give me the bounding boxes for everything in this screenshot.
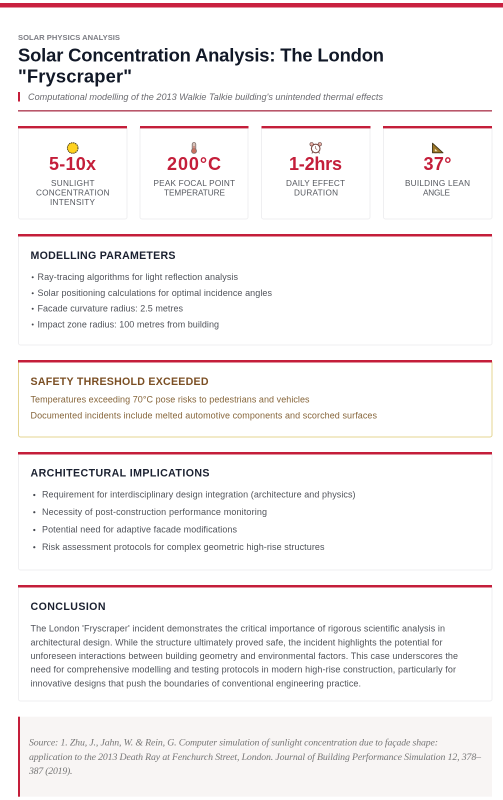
panel: modelling parameters [18, 234, 492, 345]
label: DURATION [294, 189, 338, 198]
header divider [18, 110, 492, 112]
label: PEAK FOCAL POINT [154, 179, 235, 188]
value: 5-10x [49, 154, 96, 174]
conclusion paragraph: unforeseen interactions between building geometry and environmental factors. This case underscores the [30, 651, 458, 661]
citation text: 387 (2019). [28, 766, 72, 777]
label: DAILY EFFECT [286, 179, 345, 188]
subtitle accent [18, 92, 20, 102]
stat card: lean angle [383, 126, 492, 219]
top accent bar [0, 3, 503, 8]
citation text: Source: 1. Zhu, J., Jahn, W. & Rein, G. Computer simulation of sunlight concentration due to façade shape: [29, 738, 438, 749]
title: Solar Concentration Analysis: The London [18, 44, 384, 66]
title [18, 44, 384, 86]
panel: safety threshold warning [18, 360, 492, 437]
icon: set square [432, 143, 443, 153]
stat card: concentration [18, 126, 127, 219]
icon: sun [67, 143, 78, 153]
parameter list: Solar positioning calculations for optimal incidence angles [38, 288, 272, 298]
label: TEMPERATURE [164, 189, 226, 198]
label [405, 179, 470, 198]
parameter list: Impact zone radius: 100 metres from building [38, 319, 219, 329]
heading: SAFETY THRESHOLD EXCEEDED [30, 376, 209, 388]
parameter list [32, 272, 273, 329]
label [154, 179, 235, 198]
panel: architectural implications [18, 452, 492, 570]
label: SUNLIGHT [51, 179, 94, 188]
implications list: Potential need for adaptive facade modifications [42, 525, 238, 535]
value: 1-2hrs [289, 154, 342, 174]
citation text: application to the 2013 Death Ray at Fenchurch Street, London. Journal of Building Performance Simulation 12, 378– [29, 752, 481, 763]
conclusion paragraph: architectural design. While the structure ultimately proved safe, the incident highlights the potential for [30, 637, 442, 647]
label: BUILDING LEAN [405, 179, 470, 188]
implications list: Requirement for interdisciplinary design integration (architecture and physics) [42, 490, 356, 500]
conclusion paragraph: The London 'Fryscraper' incident demonstrates the critical importance of rigorous scientific analysis in [30, 624, 445, 634]
conclusion paragraph: need for comprehensive modelling and testing protocols in modern high-rise construction, particularly for [30, 665, 456, 675]
icon: thermometer [192, 142, 196, 154]
warning text [30, 395, 378, 421]
heading: MODELLING PARAMETERS [30, 250, 176, 262]
stat card: duration [262, 126, 370, 219]
heading: ARCHITECTURAL IMPLICATIONS [30, 468, 210, 480]
conclusion paragraph [30, 624, 458, 688]
label: CONCENTRATION [36, 189, 110, 198]
panel: conclusion [18, 585, 492, 701]
eyebrow label: SOLAR PHYSICS ANALYSIS [18, 33, 120, 42]
implications list: Risk assessment protocols for complex geometric high-rise structures [42, 542, 325, 552]
parameter list: Facade curvature radius: 2.5 metres [38, 304, 184, 314]
stat card: temperature [140, 126, 248, 219]
label: ANGLE [423, 189, 451, 198]
value: 200°C [167, 154, 221, 174]
subtitle: Computational modelling of the 2013 Walkie Talkie building's unintended thermal effects [28, 92, 383, 102]
warning text: Temperatures exceeding 70°C pose risks to pedestrians and vehicles [30, 395, 310, 405]
implications list: Necessity of post-construction performance monitoring [42, 507, 267, 517]
conclusion paragraph: innovative designs that push the boundaries of conventional engineering practice. [30, 678, 361, 688]
panel: source citation [18, 717, 492, 797]
label [286, 179, 345, 198]
value: 37° [424, 154, 452, 174]
citation text [28, 738, 481, 777]
parameter list: Ray-tracing algorithms for light reflection analysis [38, 272, 238, 282]
label: INTENSITY [50, 198, 96, 207]
icon: alarm clock [310, 142, 321, 153]
label [36, 179, 110, 207]
heading: CONCLUSION [30, 601, 106, 613]
header [18, 33, 384, 102]
warning text: Documented incidents include melted automotive components and scorched surfaces [30, 411, 378, 421]
implications list [33, 490, 355, 552]
title: "Fryscraper" [18, 66, 132, 86]
